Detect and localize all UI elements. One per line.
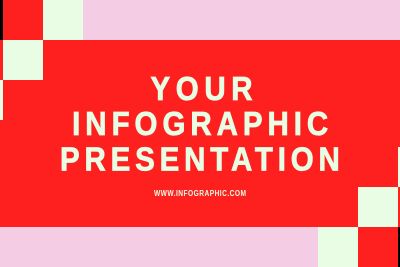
panel: top pink strip: [83, 0, 400, 40]
title: [60, 69, 340, 178]
title: PRESENTATION: [60, 140, 340, 178]
bottom-right checker pattern: [318, 147, 400, 267]
title: YOUR: [150, 69, 253, 107]
panel: bottom pink strip: [0, 227, 318, 267]
top-left checker pattern: [0, 0, 83, 120]
website url: WWW.INFOGRAPHIC.COM: [154, 188, 246, 198]
title: INFOGRAPHIC: [72, 104, 328, 142]
